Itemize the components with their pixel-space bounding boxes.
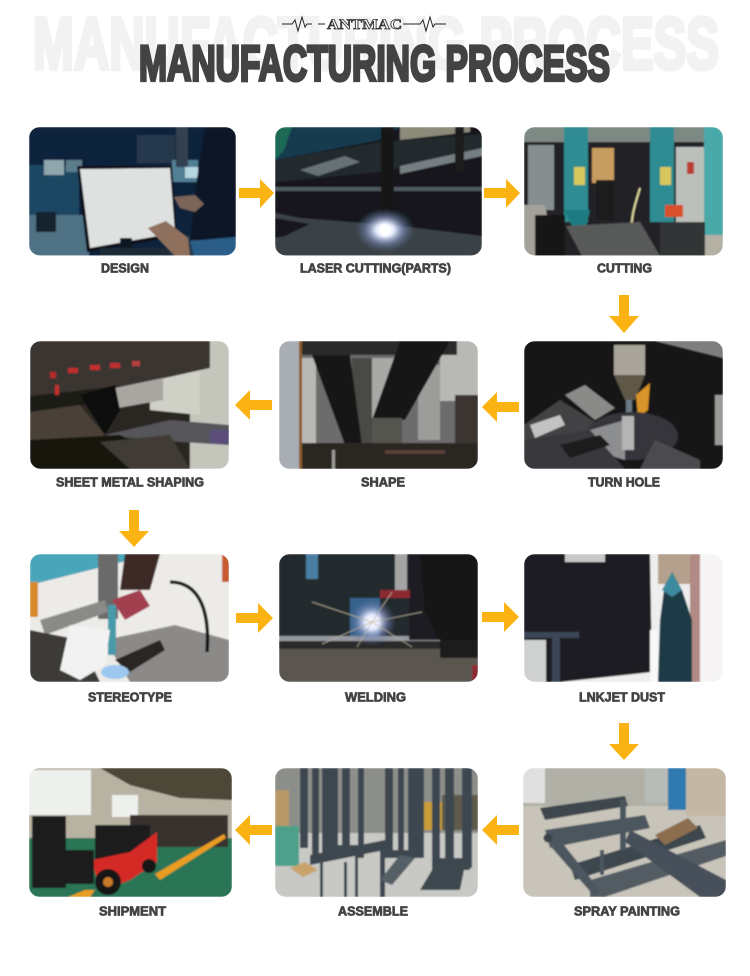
label: shipment: SHIPMENT <box>99 904 166 918</box>
panel: welding <box>279 554 478 704</box>
panel: stereotype <box>30 554 229 704</box>
label: shape: SHAPE <box>361 476 405 490</box>
label: sheet metal shaping: SHEET METAL SHAPING <box>56 476 204 490</box>
logo: Antmac <box>282 17 446 33</box>
photo: welder torch <box>30 554 229 682</box>
photo: band saw machine <box>524 127 723 256</box>
arrow left <box>482 815 519 845</box>
photo: engineer at monitor <box>29 127 236 256</box>
panel: shape <box>279 341 478 490</box>
arrow down <box>609 295 639 333</box>
arrow right <box>484 179 520 208</box>
label: cutting: CUTTING <box>597 262 652 276</box>
photo: drilling machine <box>524 341 723 469</box>
logo: Antmac: ANTMAC <box>327 17 402 33</box>
label: inkjet dust: LNKJET DUST <box>579 690 665 704</box>
photo: welding sparks <box>279 554 478 682</box>
panel: turn hole <box>524 341 723 490</box>
photo: red forklifts in warehouse <box>29 768 232 897</box>
arrow right <box>236 603 273 633</box>
label: stereotype: STEREOTYPE <box>88 690 172 704</box>
arrow left <box>235 390 272 420</box>
panel: sheet metal shaping <box>30 341 229 490</box>
photo: press brake <box>30 341 229 469</box>
photo: forklift masts <box>275 768 478 897</box>
arrow right <box>482 602 519 632</box>
label: turn hole: TURN HOLE <box>588 476 660 490</box>
photo: shaping press <box>279 341 478 469</box>
label: welding: WELDING <box>345 690 406 704</box>
photo: painted frames <box>523 768 726 897</box>
label: spray painting: SPRAY PAINTING <box>574 904 680 918</box>
panel: shipment <box>29 768 232 918</box>
label: design: DESIGN <box>101 262 149 276</box>
photo: dust spraying booth <box>524 554 723 682</box>
panel: spray painting <box>523 768 726 918</box>
arrow right <box>239 179 274 208</box>
panel: assemble <box>275 768 478 918</box>
arrow left <box>235 815 272 845</box>
panel: design <box>29 127 236 276</box>
arrow down <box>119 510 149 547</box>
arrow down <box>609 723 639 760</box>
panel: inkjet dust <box>524 554 723 704</box>
panel: laser cutting <box>275 127 482 276</box>
panel: cutting <box>524 127 723 276</box>
arrow left <box>482 392 519 422</box>
label: laser cutting: LASER CUTTING(PARTS) <box>300 262 451 276</box>
photo: laser cutter with spark <box>275 127 482 256</box>
label: assemble: ASSEMBLE <box>338 904 408 918</box>
